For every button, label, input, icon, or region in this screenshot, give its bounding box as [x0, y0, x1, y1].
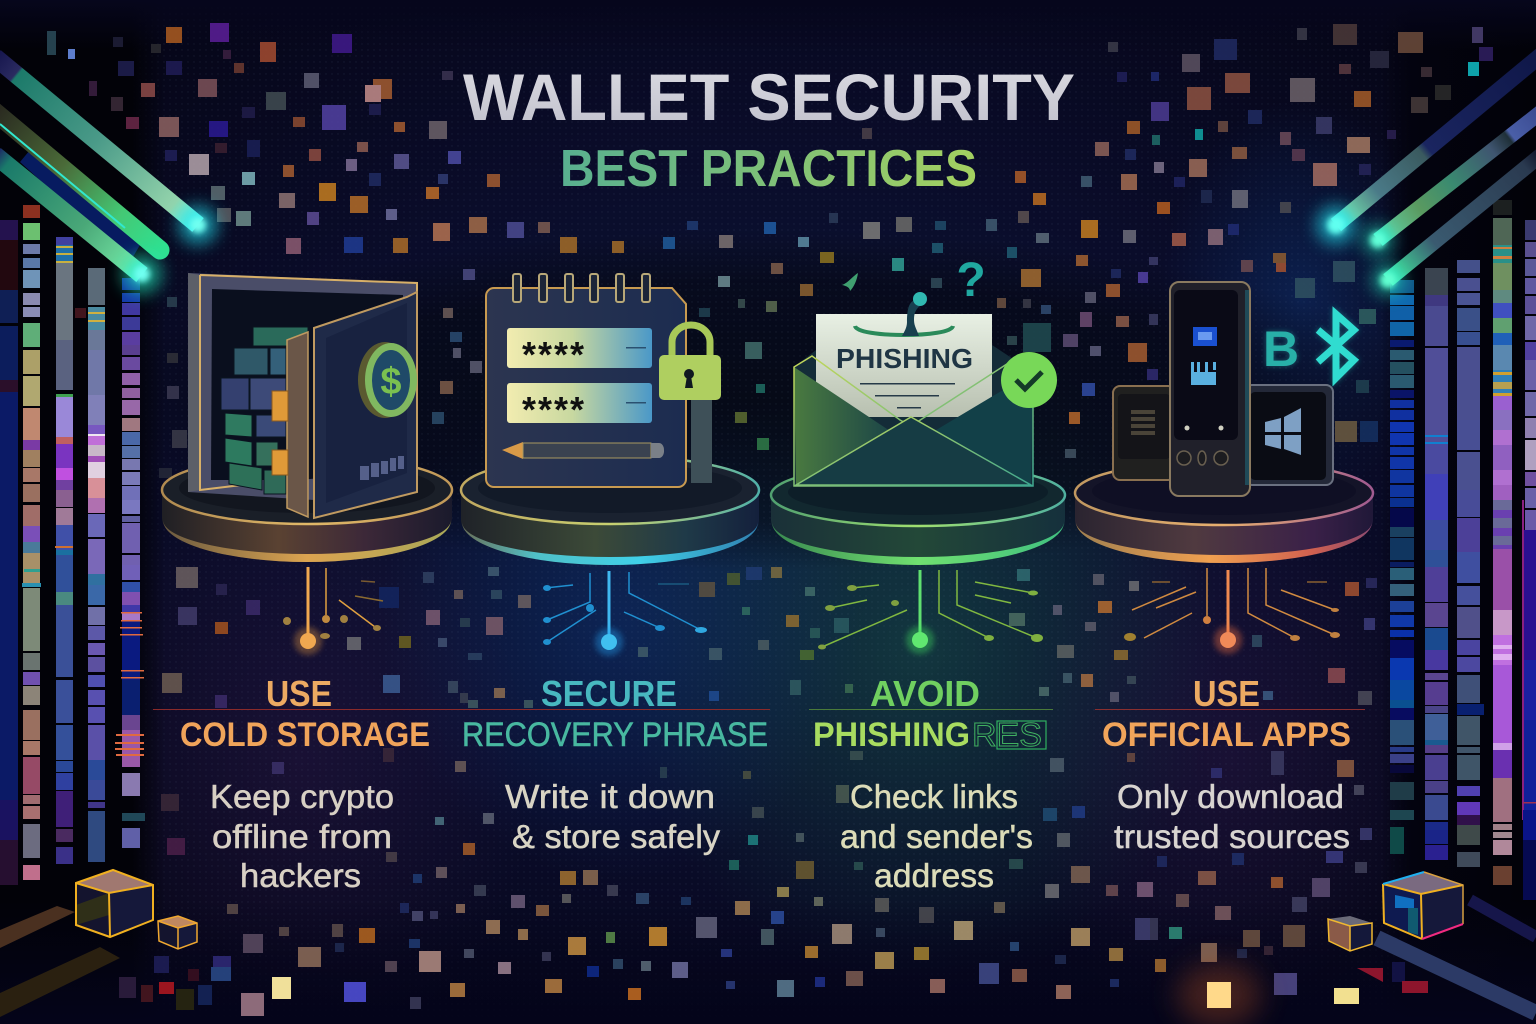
text column 3: phishing: Check links — [850, 778, 1018, 815]
green check badge — [1001, 352, 1057, 408]
text column 1: cold storage: USE — [266, 673, 332, 714]
text column 4: official apps: OFFICIAL APPS — [1102, 716, 1351, 754]
text column 2: recovery phrase: SECURE — [541, 673, 677, 714]
divider lines — [153, 709, 1365, 710]
password field 2 — [507, 383, 652, 430]
connector lines 2 — [543, 571, 707, 656]
subtitle: BEST PRACTICES — [560, 140, 977, 198]
safe door — [287, 332, 308, 517]
icon: open safe with cash — [188, 273, 417, 518]
text column 3: phishing: and sender's — [840, 818, 1033, 855]
right cubes — [1328, 872, 1463, 951]
text column 1: cold storage: offline from — [212, 818, 392, 855]
connector lines 3 — [818, 570, 1043, 654]
coin dial — [358, 342, 412, 418]
left cubes — [76, 870, 197, 949]
text column 3: phishing: address — [874, 857, 994, 894]
bitcoin symbol: B — [1263, 321, 1299, 377]
right device — [1245, 385, 1333, 485]
pen — [502, 442, 664, 459]
bitcoin symbol: B — [1263, 321, 1299, 377]
text column 3: phishing: RES — [972, 716, 1042, 753]
icon: phishing envelope — [794, 254, 1057, 486]
central phone — [1170, 282, 1250, 496]
left light beams — [0, 57, 218, 294]
text column 3: phishing: PHISHING — [813, 716, 970, 754]
left pixel pillars — [0, 205, 145, 885]
text column 2: recovery phrase: Write it down — [505, 778, 715, 815]
left device — [1113, 386, 1175, 480]
hook and handle — [855, 326, 953, 335]
spiral rings — [513, 274, 650, 302]
text column 4: official apps: trusted sources — [1114, 818, 1350, 855]
right pixel pillars — [1390, 200, 1536, 900]
text column 3: phishing — [813, 673, 1046, 894]
icon: open safe with cash: $ — [380, 361, 402, 403]
text column 1: cold storage: hackers — [240, 857, 361, 894]
platform 1 — [162, 456, 452, 562]
handles — [288, 388, 300, 421]
icon: hardware wallet devices — [1113, 282, 1354, 496]
title: WALLET SECURITY — [463, 60, 1075, 134]
connector lines 4 — [1124, 568, 1340, 654]
text column 3: phishing: AVOID — [870, 673, 980, 714]
text column 2: recovery phrase: RECOVERY PHRASE — [462, 716, 768, 754]
text column 1: cold storage — [180, 673, 430, 894]
text column 1: cold storage: COLD STORAGE — [180, 716, 430, 754]
bluetooth symbol — [1318, 314, 1354, 378]
right light beams — [1316, 55, 1536, 296]
text column 4: official apps — [1102, 673, 1351, 855]
platform 4 — [1075, 461, 1373, 563]
bottom diagonal beams — [0, 900, 1536, 1017]
phishing label: PHISHING — [836, 343, 973, 374]
door keypad — [360, 456, 404, 480]
connector lines 1 — [283, 567, 383, 655]
padlock — [659, 325, 721, 400]
text column 2: recovery phrase: & store safely — [512, 818, 721, 855]
platform 3 — [771, 464, 1065, 565]
key rod — [691, 400, 712, 483]
letter lines — [860, 383, 955, 408]
cash stacks — [221, 327, 308, 494]
platform 2 — [461, 456, 759, 565]
glowing squares at bottom — [272, 963, 1359, 1024]
windows logo — [1265, 408, 1301, 455]
text column 4: official apps: USE — [1193, 673, 1260, 714]
text column 1: cold storage: Keep crypto — [210, 778, 394, 815]
text column 4: official apps: Only download — [1117, 778, 1344, 815]
password field 1: **** — [522, 334, 584, 375]
teal question mark and leaf: ? — [956, 254, 986, 307]
icon: notebook with password fields and lock — [486, 274, 721, 487]
password field 1 — [507, 328, 652, 375]
password field 2: **** — [522, 389, 584, 430]
text column 2: recovery phrase — [462, 673, 768, 855]
